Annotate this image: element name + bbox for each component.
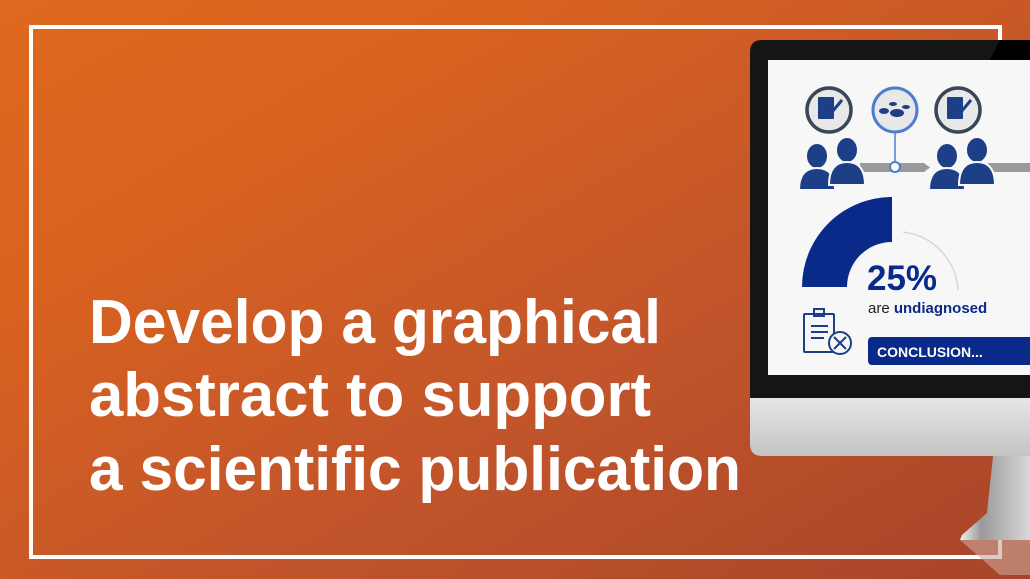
monitor [750,40,1030,575]
stand [960,456,1030,540]
conclusion bar [868,337,1030,365]
monitor: 25% [867,259,937,298]
title: a scientific publication [89,435,741,504]
bezel [750,40,1030,456]
title: Develop a graphical [89,288,661,357]
screen [768,60,1030,375]
icon circles [807,88,851,132]
monitor: are undiagnosed [868,300,987,317]
clipboard x icon [804,309,851,354]
gauge [802,197,892,287]
people [799,137,995,190]
title: abstract to support [89,361,651,430]
title [89,288,741,504]
monitor: CONCLUSION... [877,344,983,360]
chin [750,398,1030,456]
timeline bars [860,163,930,172]
